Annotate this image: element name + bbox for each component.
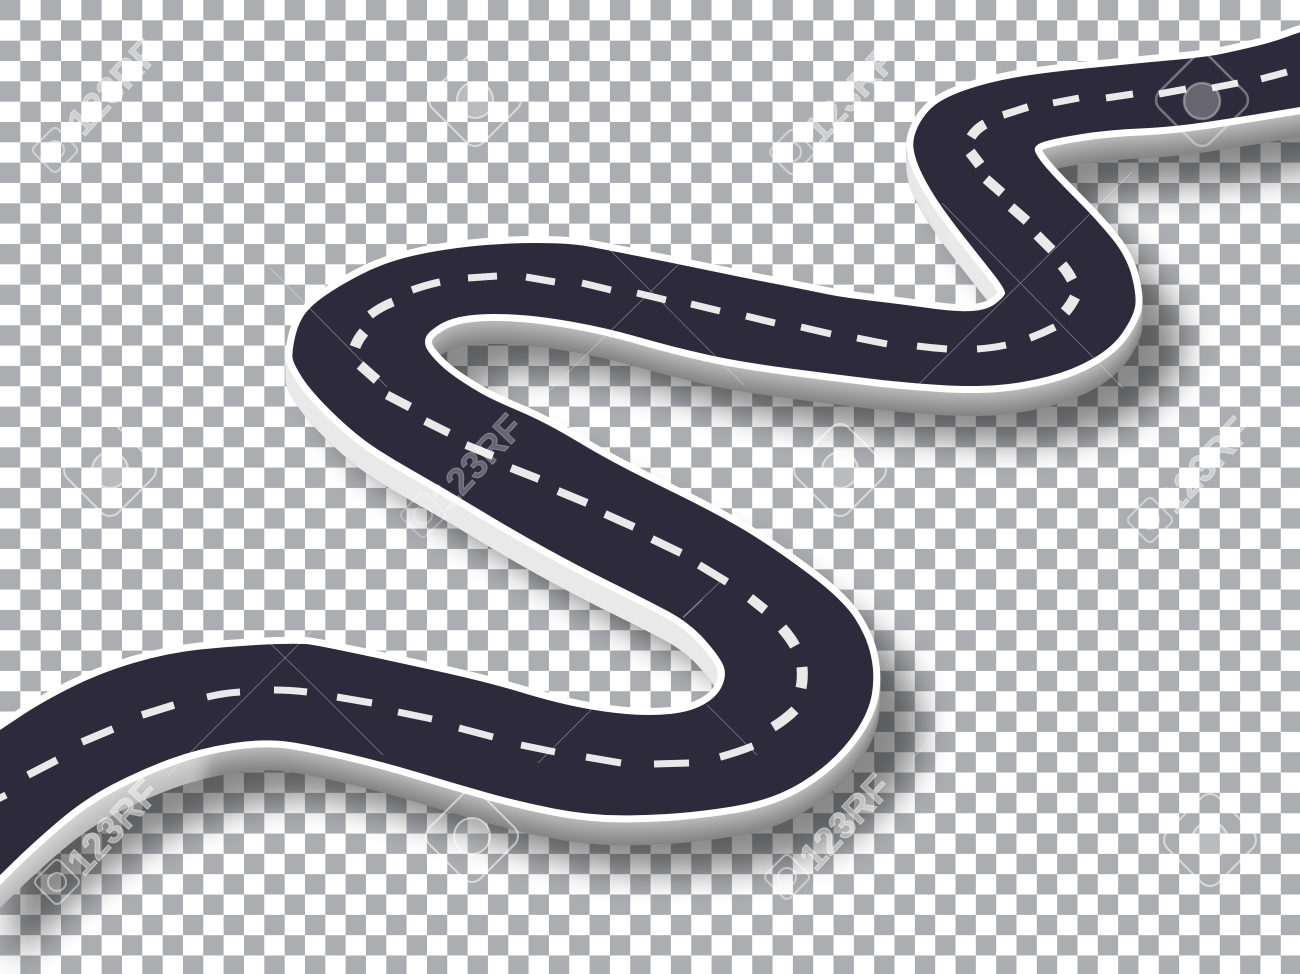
- watermark: logo bottom right: [1159, 789, 1261, 891]
- watermark: 123RF bottom left: 123RF: [59, 772, 168, 884]
- watermark: 123RF top left: [31, 32, 168, 174]
- road centre dashes: [0, 72, 1287, 803]
- watermark: 123RF top centre right: 123RF: [796, 40, 905, 152]
- watermark: 123RF top centre right: [768, 40, 905, 176]
- watermark: logo top right: [1151, 49, 1253, 151]
- watermark: logo top centre: [424, 49, 526, 151]
- watermark: logo middle right: [789, 419, 891, 521]
- watermark: 123RF bottom centre right: [763, 767, 900, 901]
- watermark: 123RF top left: 123RF: [59, 32, 168, 144]
- watermark: 123RF centre: 123RF: [423, 407, 532, 519]
- watermark: logo middle left: [59, 419, 161, 521]
- watermark: logo bottom centre: [421, 785, 523, 887]
- lit side wall sections: [0, 148, 998, 908]
- watermark: 123RF bottom centre right: 123RF: [791, 767, 900, 879]
- watermark: 123RF bottom left: [33, 772, 168, 906]
- watermark: 123RF far right: 123RF: [1151, 410, 1260, 522]
- watermark: 123RF centre: [399, 407, 532, 539]
- watermark: 123RF far right: [1126, 410, 1260, 544]
